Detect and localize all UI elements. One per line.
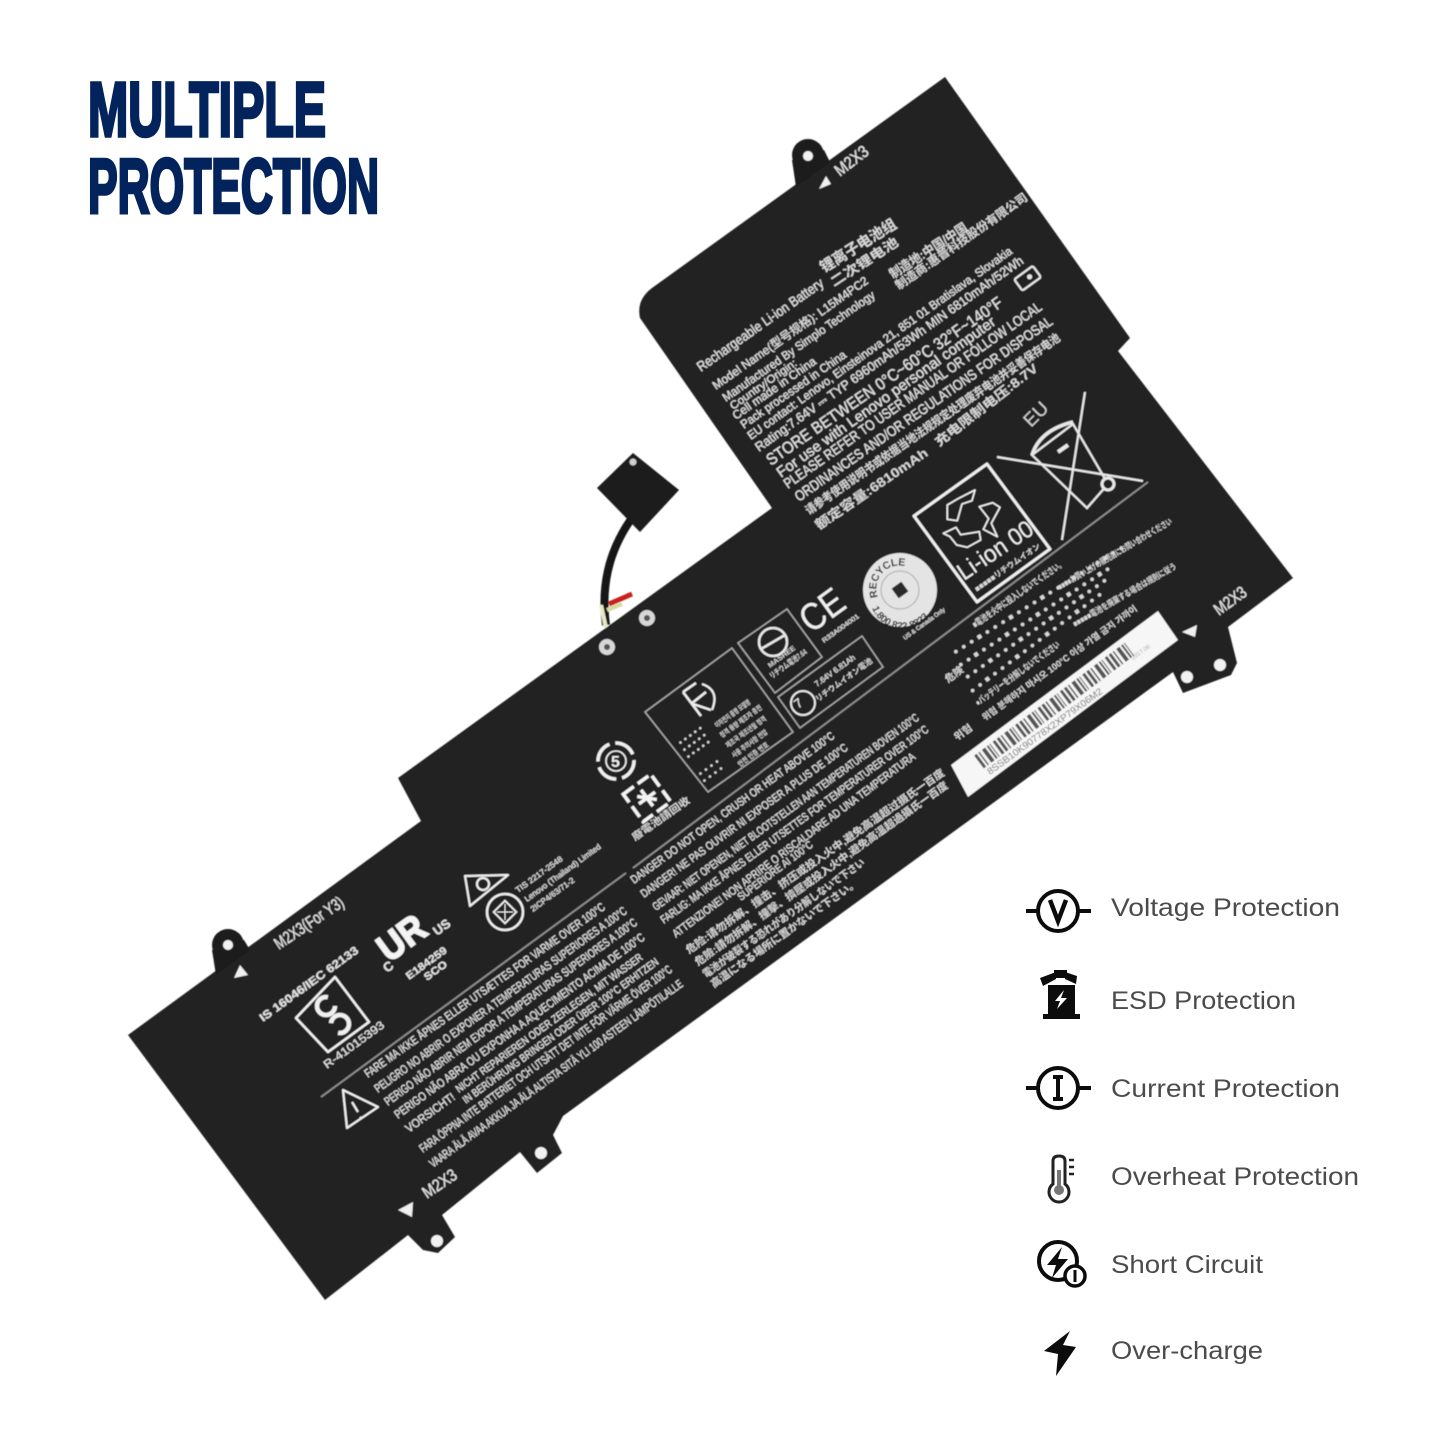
rating label text: Country/Origin: [728, 357, 799, 412]
icon: ESD [1040, 970, 1080, 1019]
warning text block: IN BERÜHRUNG BRINGEN ODER ÜBER 100°C ERHITZEN [461, 956, 661, 1106]
warning text block [361, 899, 686, 1170]
Malaysia box: MASHEE [767, 645, 797, 670]
rating label text: Rechargeable Li-ion Battery [694, 275, 826, 374]
warning text block: PERIGO NÃO ABRA OU EXPONHA A AQUECIMENTO ACIMA DE 100°C [392, 930, 648, 1121]
legend: overheat protection: Overheat Protection [1111, 1163, 1359, 1191]
japanese caution block: 위험 [951, 721, 975, 743]
rating label text: PLEASE REFER TO USER MANUAL OR FOLLOW LOCAL [781, 299, 1045, 492]
rating label text: 制造商:惠普科技股份有限公司 [892, 190, 1030, 292]
IS 16046 S mark: IS 16046/IEC 62133 [258, 945, 361, 1024]
danger text block: 電池が破裂する恐れがあり分解しないで下さい [700, 856, 867, 980]
connector cable [597, 453, 679, 628]
rating label text: Rating:7.64V ⎓ TYP 6960mAh/53Wh MIN 6810mAh/52Wh [752, 253, 1026, 454]
UR mark: C [380, 957, 397, 975]
KC box: 정격 용량 제조자 충전 [718, 703, 764, 740]
legend: voltage protection: Voltage Protection [1111, 894, 1340, 922]
rating label text: 锂离子电池组 [817, 215, 900, 276]
rating label text: For use with Lenovo personal computer [773, 314, 999, 481]
icon: 5-year circle: 5 [611, 754, 620, 771]
japanese caution block: 위험 분해하지 마시오 100°C 이상 가열 금지 가까이 [980, 603, 1139, 723]
battery photo [128, 76, 1294, 1300]
warning text block: FARA ÖPPNA INTE BATTERIET OCH UTSÄTT DET INTE FÖR VÄRME ÖVER 100°C [417, 962, 675, 1155]
warning text block: PELIGRO NO ABRIR O EXPONER A TEMPERATURAS SUPERIORES A 100°C [372, 904, 630, 1095]
danger text block: 危險:請勿拆解、撞擊、擠壓或投入火中,避免高溫超過攝氏一百度 [692, 779, 951, 968]
legend: ESD protection [1040, 970, 1296, 1019]
rating label text: 充电限制电压:8.7V [932, 360, 1041, 449]
icon: recycle seal [862, 552, 947, 642]
UR mark: SCO [422, 958, 450, 983]
title: PROTECTION [88, 144, 379, 230]
japanese caution block: ■■■■お買い上げの販売店にお問い合わせください [1056, 516, 1174, 592]
rating label text: Pack processed in China [738, 348, 849, 431]
warning text block: NICHT REPARIEREN ODER ZERLEGEN, MIT WASSER [454, 952, 645, 1095]
icon: EU crossed bin: EU [1020, 398, 1053, 432]
legend: over-charge: Over-charge [1111, 1337, 1263, 1365]
rating box: 7.64V 6.81Ah [813, 653, 857, 689]
danger text block: DANGER DO NOT OPEN, CRUSH OR HEAT ABOVE 100°C [629, 730, 837, 886]
KC box: ●●●●● [678, 725, 704, 747]
japanese caution block: ■電池を火中に投入しないでください。 [970, 558, 1066, 630]
rating label text: Cell made in China [730, 354, 819, 422]
UR mark: US [430, 915, 454, 938]
mounting tabs [212, 139, 830, 975]
rating label text: STORE BETWEEN 0°C~60°C 32°F~140°F [763, 294, 1006, 469]
rating label text: 额定容量:6810mAh [812, 445, 931, 532]
icon: recycle seal: US & Canada Only [903, 607, 947, 642]
screw markers and triangles [234, 142, 1250, 1217]
danger text block: FARLIG: MA IKKE ÅPNES ELLER UTSETTES FOR TEMPERATURER OVER 100°C [658, 723, 931, 926]
rating label text: ORDINANCES AND/OR REGULATIONS FOR DISPOSAL [792, 314, 1056, 505]
UR mark: E184259 [404, 944, 450, 982]
rating box: 7 [791, 695, 806, 711]
warning text block: FARE MA IKKE ÅPNES ELLER UTSÆTTES FOR VARME OVER 100°C [361, 899, 608, 1080]
warning text block: VORSICHT! [403, 1090, 458, 1135]
rating label text: Model Name(型号规格): L15M4PC2 [709, 273, 871, 392]
IS 16046 S mark [258, 945, 387, 1071]
screw markers and triangles: M2X3 [1210, 583, 1250, 619]
danger text block: 高温になる場所に置かないで下さい。 [708, 876, 861, 990]
legend: current protection: Current Protection [1111, 1075, 1340, 1103]
title: MULTIPLE [88, 67, 326, 153]
icon: recycle lattice: 廢電池請回收 [629, 794, 692, 843]
legend: overheat protection [1049, 1156, 1359, 1202]
rating label text: EU contact: Lenovo, Einsteinova 21, 851 01 Bratislava, Slovakia [745, 244, 1015, 442]
TIS triangle marks [465, 875, 523, 930]
battery body [128, 77, 1293, 1300]
icon: warning triangle [343, 1090, 378, 1128]
UR mark [370, 907, 454, 983]
legend: current protection [1026, 1068, 1340, 1108]
UR mark: UR [370, 907, 435, 970]
warning text block: PERIGO NÃO ABRIR NEM EXPOR A TEMPERATURAS SUPERIORES A 100°C [382, 915, 640, 1108]
warning text block: VAARA ÄLÄ AVAA AKKUA JA ÄLÄ ALTISTA SITÄ YLI 100 ASTEEN LÄMPÖTILALLE [427, 977, 686, 1170]
certification marks: 2ICP4/63/71-2 [529, 875, 577, 914]
barcode label: 8SSB10K90778X2XP79X06M2 [985, 686, 1105, 777]
legend: short circuit: Short Circuit [1111, 1251, 1263, 1279]
legend: voltage protection [1026, 891, 1340, 931]
KC box: ●●●●● [682, 732, 708, 754]
japanese caution block: ●●■●●●■●●●■●●●■●●● [967, 589, 1104, 696]
icon: lightning bolt [1044, 1331, 1076, 1376]
certification marks: Lenovo (Thailand) Limited [523, 842, 603, 904]
legend: over-charge [1044, 1331, 1263, 1376]
screw markers and triangles: M2X3 [831, 142, 872, 180]
rating label text [694, 190, 1063, 532]
barcode label: 2017.06 [1131, 644, 1152, 662]
KC box [645, 648, 793, 792]
icon: CE mark: CE [792, 580, 854, 641]
icon: Li-ion recycle box: ■■■■■リチウムイオン [973, 542, 1042, 594]
certification marks: TIS 2217-2548 [514, 854, 565, 895]
japanese caution block: ●バッテリーを分解しないでください [973, 639, 1062, 708]
icon: recycle seal: 1.800.822.8833 [872, 606, 928, 628]
certification marks [258, 842, 603, 1071]
KC box: ●●●●● [686, 739, 712, 761]
icon: CE mark: R33A004001 [821, 613, 861, 645]
screw markers and triangles: M2X3 [419, 1165, 461, 1202]
panel dividers [321, 482, 1148, 1097]
japanese caution block [942, 516, 1178, 743]
japanese caution block: ■■■■■電池を廃棄する場合は規則に従う [1071, 561, 1178, 629]
icon: voltage [1026, 891, 1091, 931]
legend: short circuit [1039, 1242, 1263, 1286]
japanese caution block: ●●●■●●●■●●●■●●●■●●● [962, 575, 1109, 682]
rating label text: 请参考使用说明书或依据当地法规规定处理废弃电池并妥善保存电池 [802, 330, 1063, 517]
rating label text: 制造地:中国/中国 [886, 220, 970, 282]
barcode label [951, 611, 1178, 797]
IS 16046 S mark: R-41015393 [322, 1019, 387, 1071]
icon: short circuit [1039, 1242, 1085, 1286]
icon: battery small [1014, 266, 1041, 291]
KC box: ●●●● [702, 765, 725, 785]
screw markers and triangles: M2X3(For Y3) [271, 893, 348, 953]
KC box: 제조국 제조년월 정격 [724, 714, 768, 750]
icon: 5-year circle [598, 743, 634, 779]
icon: current [1026, 1068, 1091, 1108]
icon: recycle seal: RECYCLE [868, 558, 906, 598]
danger text block: SUPERIORE AI 100°C [736, 839, 816, 903]
icon: EU crossed bin [997, 392, 1143, 540]
danger text block: ATTENZIONE! NON APRIRE O RISCALDARE AD UNA TEMPERATURA [671, 751, 918, 940]
icon: Li-ion recycle box [914, 464, 1050, 602]
Malaysia box [738, 609, 822, 693]
danger text block: 危险:请勿拆解、撞击、挤压或投入火中,避免高温超过摄氏一百度 [683, 766, 948, 956]
japanese caution block: 危険 [942, 663, 966, 685]
japanese caution block: ●●●■●●●■●●●■●●●■●●●■●● [951, 542, 1126, 657]
icon: Li-ion recycle box: Li-ion 00 [952, 515, 1039, 586]
Malaysia box: リチウム電池7.64 [767, 646, 809, 681]
KC box: ●●●● [698, 758, 721, 778]
danger text block [629, 712, 951, 990]
regulatory boxes [645, 609, 883, 792]
KC box: 사용 주의사항 전압 [730, 727, 769, 760]
rating label text: Manufactured By Simplo Technology [720, 288, 878, 404]
KC box: 안전 인증 번호 [736, 740, 771, 769]
danger text block: GEVAAR: NIET OPENEN, NIET BLOOTSTELLEN AAN TEMPERATUREN BOVEN 100°C [651, 712, 922, 913]
title [88, 67, 379, 230]
icon: recycle lattice [623, 774, 692, 843]
rating box [778, 636, 883, 728]
legend: ESD protection: ESD Protection [1111, 987, 1296, 1015]
rating box: リチウムイオン電池 [813, 656, 874, 704]
KC box: 이차전지 품명 모델명 [713, 698, 752, 730]
icon: thermometer [1049, 1156, 1074, 1202]
rating label text: 二次锂电池 [827, 234, 901, 290]
danger text block: DANGER! NE PAS OUVRIR NI EXPOSER A PLUS DE 100°C [639, 742, 850, 900]
japanese caution block: ●●■●●●■●●●■●●●■●●●■● [956, 563, 1112, 670]
